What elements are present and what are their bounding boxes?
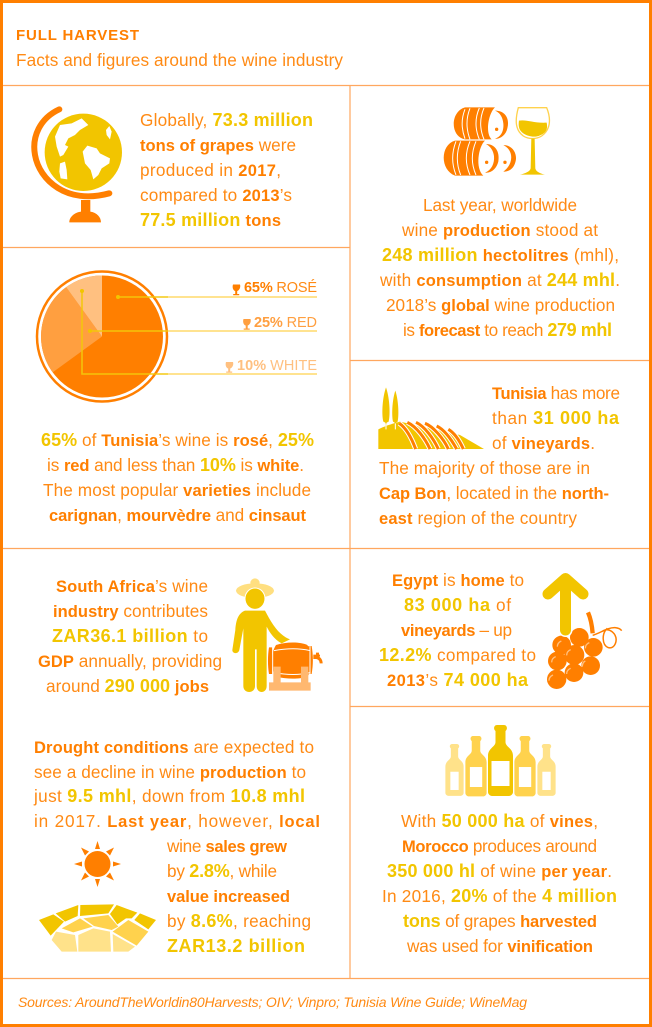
text: Tunisia wine types: 65% of Tunisia’s wine is rosé, 25% (41, 430, 314, 450)
sources: Sources: AroundTheWorldin80Harvests; OIV; Vinpro; Tunisia Wine Guide; WineMag (18, 994, 527, 1010)
legend: 10% WHITE (237, 358, 317, 374)
text: Tunisia vineyards (379, 383, 620, 528)
text: world production: 248 million hectolitres (mhl), (382, 245, 619, 265)
icon: wine bottles (445, 725, 556, 796)
text: Tunisia wine types: The most popular varieties include (43, 480, 311, 500)
text: Tunisia vineyards: than 31 000 ha (492, 408, 620, 428)
text: Tunisia wine types (41, 430, 314, 525)
text: drought: in 2017. Last year, however, local (34, 811, 320, 831)
text: Egypt: vineyards – up (401, 620, 512, 640)
text: Morocco: Morocco produces around (402, 836, 597, 856)
icon: up arrow (548, 578, 583, 630)
text: Morocco: was used for vinification (406, 936, 593, 956)
text: world production (379, 195, 620, 340)
text: South Africa: industry contributes (53, 601, 208, 621)
icon: globe (34, 109, 122, 222)
text: drought: wine sales grew (166, 836, 287, 856)
text: grape figures: compared to 2013’s (140, 185, 292, 205)
text: world production: Last year, worldwide (423, 195, 577, 215)
text: grape figures: 77.5 million tons (140, 210, 281, 230)
text: drought: see a decline in wine production to (34, 762, 306, 782)
text: Egypt: 12.2% compared to (379, 645, 536, 665)
panel: Morocco (382, 725, 617, 956)
text: Egypt: 2013’s 74 000 ha (387, 670, 529, 690)
panel: drought (33, 737, 320, 956)
text: world production: 2018’s global wine production (386, 295, 615, 315)
text: Morocco: In 2016, 20% of the 4 million (382, 886, 617, 906)
text: Tunisia wine types: is red and less than 10% is white. (47, 455, 304, 475)
text: South Africa: GDP annually, providing (38, 651, 222, 671)
legend: 65% ROSÉ (244, 279, 317, 296)
title: Facts and figures around the wine industry (16, 50, 343, 70)
icon: farmer and barrel (232, 578, 323, 692)
text: Morocco: With 50 000 ha of vines, (401, 811, 598, 831)
text: grape figures: Globally, 73.3 million (140, 110, 313, 130)
text: world production: is forecast to reach 279 mhl (403, 320, 612, 340)
text: Egypt (379, 570, 536, 690)
text: drought: by 8.6%, reaching (167, 911, 311, 931)
icon: barrels (444, 107, 549, 176)
text: world production: with consumption at 244 mhl. (379, 270, 620, 290)
text: South Africa: ZAR36.1 billion to (52, 626, 208, 646)
text: drought: value increased (167, 888, 290, 906)
legend (226, 279, 317, 374)
icon: grapes (547, 612, 622, 689)
text: Tunisia vineyards: of vineyards. (492, 433, 595, 453)
text: Morocco: 350 000 hl of wine per year. (387, 861, 612, 881)
icon: cracked earth (39, 904, 156, 952)
text: Morocco (382, 811, 617, 956)
title: FULL HARVEST (16, 27, 139, 44)
text: Morocco: tons of grapes harvested (403, 911, 597, 931)
pie chart (37, 272, 317, 402)
text: Tunisia vineyards: Tunisia has more (492, 383, 620, 403)
text: grape figures (140, 110, 313, 230)
text: drought: Drought conditions are expected to (34, 737, 314, 757)
text: Tunisia vineyards: east region of the country (379, 508, 577, 528)
text: South Africa: South Africa’s wine (56, 576, 208, 596)
text: world production: wine production stood at (401, 220, 598, 240)
text: Tunisia vineyards: Cap Bon, located in the north- (379, 483, 609, 503)
text: drought: just 9.5 mhl, down from 10.8 mhl (33, 786, 305, 806)
text: Egypt: 83 000 ha of (404, 595, 511, 615)
icon: vineyard (378, 387, 484, 449)
text: South Africa: around 290 000 jobs (46, 676, 209, 696)
panel: Egypt (379, 570, 622, 690)
text: Egypt: Egypt is home to (392, 570, 524, 590)
panel: Tunisia wine types (37, 272, 317, 525)
title (16, 27, 343, 70)
panel: global grape production (34, 109, 313, 230)
legend: 25% RED (254, 315, 317, 331)
panel: Tunisia vineyards (378, 383, 620, 528)
text: grape figures: tons of grapes were (140, 135, 296, 155)
panel: world production (379, 107, 620, 340)
text: grape figures: produced in 2017, (140, 160, 281, 180)
text: drought: ZAR13.2 billion (167, 936, 305, 956)
text: drought (33, 737, 320, 956)
text: South Africa (38, 576, 222, 696)
text: Tunisia vineyards: The majority of those are in (379, 458, 590, 478)
icon: sun (74, 841, 121, 887)
text: drought: by 2.8%, while (167, 861, 277, 881)
panel: South Africa (38, 576, 323, 696)
text: Tunisia wine types: carignan, mourvèdre and cinsaut (49, 505, 306, 525)
